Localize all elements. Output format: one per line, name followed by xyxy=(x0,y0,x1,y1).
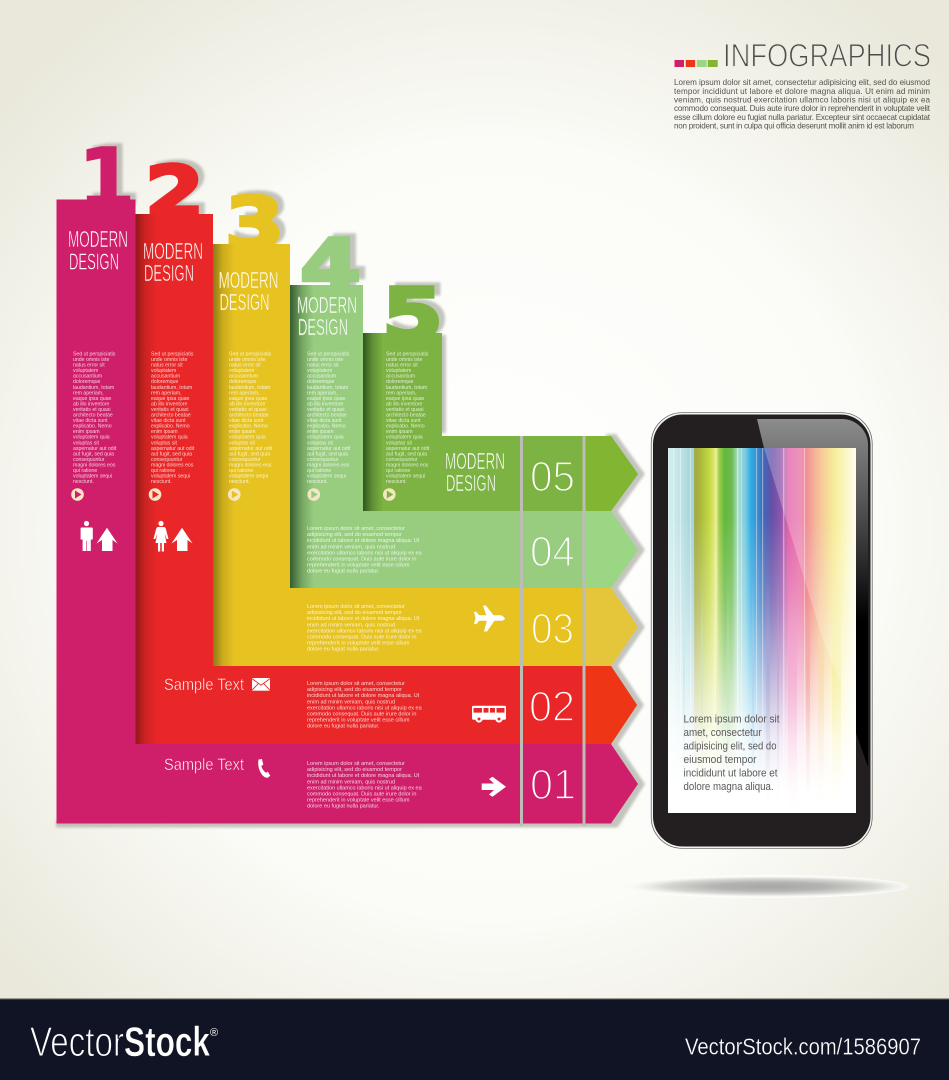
large band numbers xyxy=(529,453,576,809)
footer logo xyxy=(30,1018,218,1065)
band 01 text: adipisicing elit, sed do eiusmod tempor xyxy=(307,767,402,773)
column text 3: consequuntur xyxy=(229,457,261,463)
column text 2: aspernatur aut odit xyxy=(151,446,195,452)
drop shadow of steps xyxy=(56,129,645,828)
band 01 text: Lorem ipsum dolor sit amet, consectetur xyxy=(307,761,405,767)
column text 4: voluptatem xyxy=(307,368,332,374)
column text 1: nesciunt. xyxy=(73,479,94,485)
column text 1: veritatis et quasi xyxy=(73,407,110,413)
green band xyxy=(363,333,638,511)
column text 4: vitae dicta sunt xyxy=(307,418,342,424)
screen caption: adipisicing elit, sed do xyxy=(684,740,776,752)
band 04 text: adipisicing elit, sed do eiusmod tempor xyxy=(307,532,402,538)
screen caption: Lorem ipsum dolor sit xyxy=(684,714,780,726)
column text 3: aspernatur aut odit xyxy=(229,446,273,452)
column text 1: aspernatur aut odit xyxy=(73,446,117,452)
intro paragraph: veniam, quis nostrud exercitation ullamco laboris nisi ut aliquip ex ea xyxy=(674,96,930,104)
column text 5: aut fugit, sed quia xyxy=(386,451,427,457)
column text 4: voluptatem sequi xyxy=(307,474,346,480)
footer url: VectorStock.com/1586907 xyxy=(685,1034,921,1060)
column text 1: ab illo inventore xyxy=(73,401,109,407)
column text 3: laudantium, totam xyxy=(229,385,270,391)
column text 3: voluptas sit xyxy=(229,440,256,446)
column text 3: rem aperiam, xyxy=(229,390,260,396)
column text 2: voluptas sit xyxy=(151,440,178,446)
band 02 text xyxy=(307,681,423,730)
light green arrow tip xyxy=(585,511,638,588)
column text 3: nesciunt. xyxy=(229,479,250,485)
number 3: 3 xyxy=(225,182,284,265)
column text 3: voluptatem sequi xyxy=(229,474,268,480)
column text 4: magni dolores eos xyxy=(307,462,350,468)
column text 2: ab illo inventore xyxy=(151,401,187,407)
step 3: yellow xyxy=(213,182,638,666)
large band numbers: 04 xyxy=(530,528,575,576)
column text 2 xyxy=(151,352,195,485)
band 03 text: Lorem ipsum dolor sit amet, consectetur xyxy=(307,604,405,610)
intro paragraph: esse cillum dolore eu fugiat nulla pariatur. Excepteur sint occaecat cupidatat xyxy=(674,113,931,122)
column text 3: magni dolores eos xyxy=(229,462,272,468)
column text 1: magni dolores eos xyxy=(73,462,116,468)
column text 1: explicabo. Nemo xyxy=(73,424,112,430)
band 01 text: commodo consequat. Duis aute irure dolor in xyxy=(307,792,416,798)
band 02 text: incididunt ut labore et dolore magna aliqua. Ut xyxy=(307,693,420,699)
pale streaks xyxy=(673,448,805,813)
column text 2: voluptatem sequi xyxy=(151,474,190,480)
screen caption xyxy=(684,714,780,793)
column text 5: eaque ipsa quae xyxy=(386,396,424,402)
column text 2: vitae dicta sunt xyxy=(151,418,186,424)
column text 1: unde omnis iste xyxy=(73,357,109,363)
column text 3: voluptatem quia xyxy=(229,435,266,441)
intro paragraph: commodo consequat. Duis aute irure dolor in reprehenderit in voluptate velit xyxy=(674,104,931,113)
column text 3: veritatis et quasi xyxy=(229,407,266,413)
band 04 text: Lorem ipsum dolor sit amet, consectetur xyxy=(307,526,405,532)
column text 4 xyxy=(307,352,351,485)
band 01 text: enim ad minim veniam, quis nostrud xyxy=(307,779,395,785)
screen xyxy=(668,448,856,813)
column text 4: accusantium xyxy=(307,374,336,380)
column text 2: doloremque xyxy=(151,379,179,385)
modern design headings: MODERN xyxy=(143,238,203,264)
column text 2: unde omnis iste xyxy=(151,357,187,363)
column text 2: voluptatem xyxy=(151,368,176,374)
column text 2: voluptatem quia xyxy=(151,435,188,441)
phone body xyxy=(652,414,872,848)
column text 2: explicabo. Nemo xyxy=(151,424,190,430)
band 02 text: enim ad minim veniam, quis nostrud xyxy=(307,699,395,705)
icon: bus xyxy=(472,706,506,723)
step 2: red xyxy=(136,151,637,744)
column text 5: vitae dicta sunt xyxy=(386,418,421,424)
modern design headings xyxy=(68,226,505,496)
column text 3: aut fugit, sed quia xyxy=(229,451,270,457)
large band numbers: 01 xyxy=(530,761,576,809)
column text 2: enim ipsam xyxy=(151,429,178,435)
column text 2: architecto beatae xyxy=(151,412,191,418)
column text 4: enim ipsam xyxy=(307,429,334,435)
modern design headings: DESIGN xyxy=(144,260,194,286)
column text 3: vitae dicta sunt xyxy=(229,418,264,424)
modern design headings: DESIGN xyxy=(220,289,270,315)
column text 3: unde omnis iste xyxy=(229,357,265,363)
screen caption: dolore magna aliqua. xyxy=(684,781,774,793)
band 02 text: exercitation ullamco laboris nisi ut aliquip ex ea xyxy=(307,705,423,711)
column text 5: unde omnis iste xyxy=(386,357,422,363)
red band xyxy=(136,214,637,744)
column text 2: veritatis et quasi xyxy=(151,407,188,413)
column text 5: architecto beatae xyxy=(386,412,426,418)
column text 2: rem aperiam, xyxy=(151,390,182,396)
green arrow tip xyxy=(585,436,638,511)
column text 2: qui ratione xyxy=(151,468,175,474)
modern design headings: MODERN xyxy=(445,448,505,474)
vertical dividers xyxy=(520,436,586,826)
column text 1: voluptatem xyxy=(73,368,98,374)
icon: man and up arrow xyxy=(81,521,118,551)
step 4: light green xyxy=(290,224,638,588)
column text 5: aspernatur aut odit xyxy=(386,446,430,452)
column text 2: natus error sit xyxy=(151,363,183,369)
icon: right arrow xyxy=(482,777,506,797)
column text 1: architecto beatae xyxy=(73,412,113,418)
footer bar xyxy=(0,998,949,1080)
column text 3: qui ratione xyxy=(229,468,253,474)
column text 1: qui ratione xyxy=(73,468,97,474)
number 4: 4 xyxy=(300,224,361,307)
band 01 text: exercitation ullamco laboris nisi ut aliquip ex ea xyxy=(307,785,423,791)
column text 4: qui ratione xyxy=(307,468,331,474)
red arrow tip xyxy=(585,666,637,744)
screen caption: amet, consectetur xyxy=(684,727,762,739)
column text 4: aspernatur aut odit xyxy=(307,446,351,452)
column text 4: rem aperiam, xyxy=(307,390,338,396)
screen glare xyxy=(764,448,856,720)
drop shadow of steps: 2 xyxy=(151,148,210,231)
column text 5: explicabo. Nemo xyxy=(386,424,425,430)
column text 2: laudantium, totam xyxy=(151,385,192,391)
column text 2: magni dolores eos xyxy=(151,462,194,468)
column text 3: explicabo. Nemo xyxy=(229,424,268,430)
column text 3: doloremque xyxy=(229,379,257,385)
column text 4: laudantium, totam xyxy=(307,385,348,391)
column text 1: rem aperiam, xyxy=(73,390,104,396)
drop shadow of steps: 5 xyxy=(388,270,449,353)
column text 2: Sed ut perspiciatis xyxy=(151,352,194,358)
band 04 text: reprehenderit in voluptate velit esse cillum xyxy=(307,563,410,569)
band 02 text: commodo consequat. Duis aute irure dolor in xyxy=(307,712,416,718)
column text 1: Sed ut perspiciatis xyxy=(73,352,116,358)
column text 4: ab illo inventore xyxy=(307,401,343,407)
column text 5: accusantium xyxy=(386,374,415,380)
yellow arrow tip xyxy=(585,588,638,666)
column text 5: enim ipsam xyxy=(386,429,413,435)
drop shadow of steps: 4 xyxy=(306,221,367,304)
column text 5: voluptas sit xyxy=(386,440,413,446)
sample text labels: Sample Text xyxy=(164,756,244,774)
column text 1: eaque ipsa quae xyxy=(73,396,111,402)
column text 4: nesciunt. xyxy=(307,479,328,485)
icon: telephone xyxy=(258,759,270,778)
step 5: green xyxy=(363,273,638,511)
intro paragraph: Lorem ipsum dolor sit amet, consectetur adipisicing elit, sed do eiusmod xyxy=(674,78,930,87)
column text 4: voluptatem quia xyxy=(307,435,344,441)
rainbow streaks xyxy=(683,595,841,768)
column text 5: nesciunt. xyxy=(386,479,407,485)
column text 3: accusantium xyxy=(229,374,258,380)
light green band xyxy=(290,285,638,588)
modern design headings: DESIGN xyxy=(69,248,119,274)
column text 5: magni dolores eos xyxy=(386,462,429,468)
column text 2: nesciunt. xyxy=(151,479,172,485)
column text 1: natus error sit xyxy=(73,363,105,369)
column text 1: voluptas sit xyxy=(73,440,100,446)
column text 5: veritatis et quasi xyxy=(386,407,423,413)
modern design headings: MODERN xyxy=(297,292,357,318)
column text 2: consequuntur xyxy=(151,457,183,463)
phone floor shadow xyxy=(622,875,908,898)
column text 4: eaque ipsa quae xyxy=(307,396,345,402)
column text 5: qui ratione xyxy=(386,468,410,474)
column text 5: laudantium, totam xyxy=(386,385,427,391)
sample text labels xyxy=(164,676,244,774)
column text 3: architecto beatae xyxy=(229,412,269,418)
column text 1: accusantium xyxy=(73,374,102,380)
band 02 text: reprehenderit in voluptate velit esse cillum xyxy=(307,718,410,724)
modern design headings: DESIGN xyxy=(298,314,348,340)
drop shadow of steps: 3 xyxy=(231,179,290,262)
column text 4: architecto beatae xyxy=(307,412,347,418)
sample text labels: Sample Text xyxy=(164,676,244,694)
column text 3: voluptatem xyxy=(229,368,254,374)
column text 1: laudantium, totam xyxy=(73,385,114,391)
column text 4: unde omnis iste xyxy=(307,357,343,363)
modern design headings: MODERN xyxy=(68,226,128,252)
number 2: 2 xyxy=(145,151,204,234)
column text 1 xyxy=(73,352,117,485)
column text 3: Sed ut perspiciatis xyxy=(229,352,272,358)
column text 2: accusantium xyxy=(151,374,180,380)
intro paragraph: tempor incididunt ut labore et dolore magna aliqua. Ut enim ad minim xyxy=(674,87,930,96)
column text 1: vitae dicta sunt xyxy=(73,418,108,424)
column text 5: rem aperiam, xyxy=(386,390,417,396)
footer logo: Stock xyxy=(124,1018,210,1065)
intro paragraph: non proident, sunt in culpa qui officia deserunt mollit anim id est laborum xyxy=(674,122,914,131)
band 03 text: exercitation ullamco laboris nisi ut aliquip ex ea xyxy=(307,628,423,634)
column text 5: voluptatem sequi xyxy=(386,474,425,480)
column text 2: eaque ipsa quae xyxy=(151,396,189,402)
colour squares xyxy=(674,60,718,67)
icon: airplane xyxy=(474,606,505,632)
bezel reflection xyxy=(757,419,868,766)
footer logo: ® xyxy=(210,1027,218,1039)
column text 1: enim ipsam xyxy=(73,429,100,435)
header block xyxy=(674,38,931,131)
column text 5: voluptatem xyxy=(386,368,411,374)
band 04 text: commodo consequat. Duis aute irure dolor in xyxy=(307,556,416,562)
column text 5: Sed ut perspiciatis xyxy=(386,352,429,358)
column text 5: voluptatem quia xyxy=(386,435,423,441)
band 03 text: adipisicing elit, sed do eiusmod tempor xyxy=(307,610,402,616)
column text 4: voluptas sit xyxy=(307,440,334,446)
large band numbers: 05 xyxy=(530,453,575,501)
icon: envelope xyxy=(252,678,270,691)
column text 1: voluptatem quia xyxy=(73,435,110,441)
column text 4: doloremque xyxy=(307,379,335,385)
footer logo: Vector xyxy=(30,1018,124,1065)
modern design headings: MODERN xyxy=(218,267,278,293)
band 04 text: dolore eu fugiat nulla pariatur. xyxy=(307,569,380,575)
screen caption: eiusmod tempor xyxy=(684,754,757,766)
icon: woman and up arrow xyxy=(154,521,192,552)
column text 3: eaque ipsa quae xyxy=(229,396,267,402)
column text 5: ab illo inventore xyxy=(386,401,422,407)
band 03 text: reprehenderit in voluptate velit esse cillum xyxy=(307,641,410,647)
column text 3: natus error sit xyxy=(229,363,261,369)
play icons xyxy=(71,488,396,501)
band 04 text: exercitation ullamco laboris nisi ut aliquip ex ea xyxy=(307,550,423,556)
screen caption: incididunt ut labore et xyxy=(684,768,778,780)
large band numbers: 03 xyxy=(531,605,574,653)
large band numbers: 02 xyxy=(529,683,575,731)
column text 4: veritatis et quasi xyxy=(307,407,344,413)
smartphone xyxy=(651,413,872,848)
band 01 text: incididunt ut labore et dolore magna aliqua. Ut xyxy=(307,773,420,779)
column text 5: natus error sit xyxy=(386,363,418,369)
column text 4: Sed ut perspiciatis xyxy=(307,352,350,358)
column text 4: consequuntur xyxy=(307,457,339,463)
pink band xyxy=(56,200,638,824)
band 03 text: enim ad minim veniam, quis nostrud xyxy=(307,622,395,628)
column text 2: aut fugit, sed quia xyxy=(151,451,192,457)
intro paragraph xyxy=(674,78,931,131)
column text 5: doloremque xyxy=(386,379,414,385)
column text 1: aut fugit, sed quia xyxy=(73,451,114,457)
band 03 text: dolore eu fugiat nulla pariatur. xyxy=(307,647,380,653)
column text 4: explicabo. Nemo xyxy=(307,424,346,430)
column text 3 xyxy=(229,352,273,485)
band 01 text xyxy=(307,761,423,810)
modern design headings: DESIGN xyxy=(446,470,496,496)
column text 1: doloremque xyxy=(73,379,101,385)
column text 5: consequuntur xyxy=(386,457,418,463)
band 02 text: Lorem ipsum dolor sit amet, consectetur xyxy=(307,681,405,687)
column text 4: aut fugit, sed quia xyxy=(307,451,348,457)
drop shadow of steps: 1 xyxy=(84,129,141,224)
number 1: 1 xyxy=(78,132,135,227)
band 03 text xyxy=(307,604,423,653)
band 04 text: enim ad minim veniam, quis nostrud xyxy=(307,544,395,550)
column text 1: voluptatem sequi xyxy=(73,474,112,480)
band 03 text: incididunt ut labore et dolore magna aliqua. Ut xyxy=(307,616,420,622)
yellow band xyxy=(213,244,638,666)
band 03 text: commodo consequat. Duis aute irure dolor in xyxy=(307,634,416,640)
band 02 text: adipisicing elit, sed do eiusmod tempor xyxy=(307,687,402,693)
column text 4: natus error sit xyxy=(307,363,339,369)
band 02 text: dolore eu fugiat nulla pariatur. xyxy=(307,724,380,730)
band 04 text: incididunt ut labore et dolore magna aliqua. Ut xyxy=(307,538,420,544)
band 04 text xyxy=(307,526,423,575)
column text 1: consequuntur xyxy=(73,457,105,463)
column text 5 xyxy=(386,352,430,485)
band 01 text: reprehenderit in voluptate velit esse cillum xyxy=(307,798,410,804)
column text 3: enim ipsam xyxy=(229,429,256,435)
column text 3: ab illo inventore xyxy=(229,401,265,407)
band 01 text: dolore eu fugiat nulla pariatur. xyxy=(307,804,380,810)
number 5: 5 xyxy=(382,273,443,356)
